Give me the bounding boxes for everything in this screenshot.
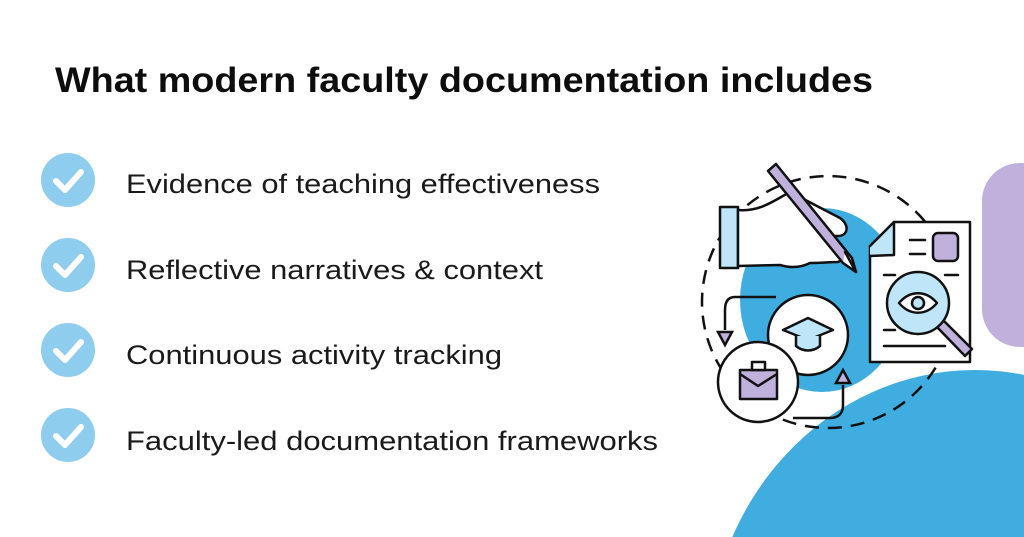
icon: briefcase circle xyxy=(718,342,798,422)
checklist xyxy=(41,153,658,462)
arrows xyxy=(718,297,850,418)
dashed circle xyxy=(702,176,954,428)
upper blue blob xyxy=(740,208,904,392)
item 4 xyxy=(41,408,658,462)
title: What modern faculty documentation includes xyxy=(55,61,873,100)
big blue blob xyxy=(707,370,1024,537)
purple block xyxy=(982,163,1024,347)
item 3 xyxy=(41,323,502,377)
item 1 xyxy=(41,153,600,207)
icon: document with magnifier xyxy=(870,222,972,362)
item 2 xyxy=(41,238,544,292)
icon: graduation circle xyxy=(768,295,848,375)
item 1: Evidence of teaching effectiveness xyxy=(126,169,600,199)
item 2: Reflective narratives & context xyxy=(126,255,544,285)
icon: hand with pen xyxy=(720,164,856,272)
item 4: Faculty-led documentation frameworks xyxy=(126,426,658,456)
illustration xyxy=(702,163,1024,537)
item 3: Continuous activity tracking xyxy=(126,340,502,370)
